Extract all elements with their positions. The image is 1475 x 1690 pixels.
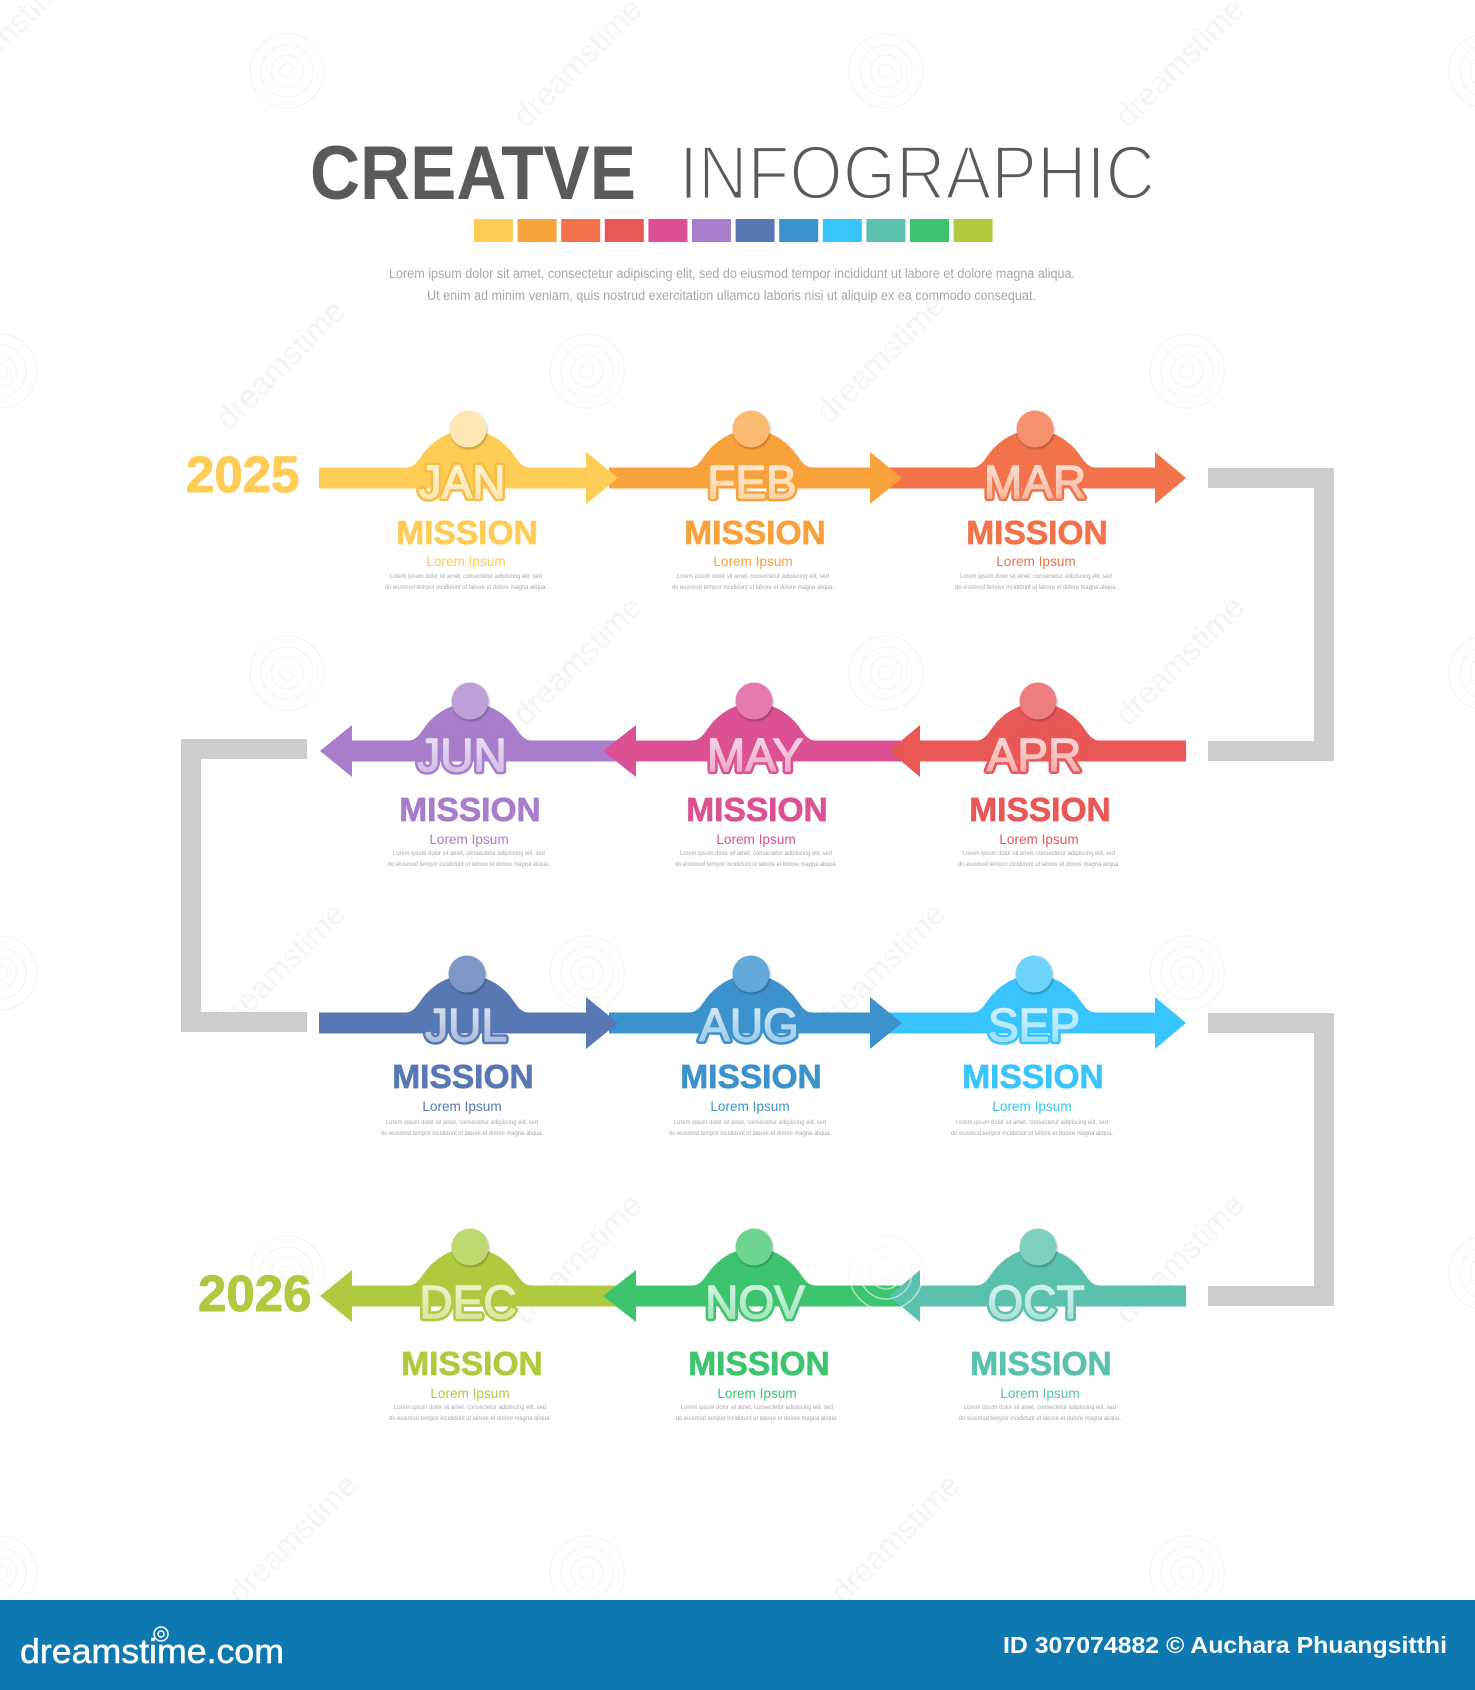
- arrow: December: [320, 1228, 620, 1322]
- description: do eiusmod tempor incididunt ut labore et dolore magna aliqua.: [381, 1130, 543, 1137]
- description: Lorem ipsum dolor sit amet, consectetur adipiscing elit, sed: [681, 1404, 834, 1411]
- background watermark: dreamstime: [808, 286, 952, 430]
- mission heading: MISSION: [969, 792, 1111, 829]
- month label APR: APR: [987, 729, 1081, 781]
- subheading: Lorem Ipsum: [716, 832, 796, 847]
- month label DEC: DEC: [419, 1276, 517, 1328]
- month label MAR: MAR: [984, 456, 1086, 508]
- description: do eiusmod tempor incididunt ut labore et dolore magna aliqua.: [676, 1415, 838, 1422]
- arrow: April: [889, 682, 1186, 777]
- arrow: May: [603, 682, 905, 777]
- description: [951, 1119, 1113, 1137]
- description: do eiusmod tempor incididunt ut labore et dolore magna aliqua.: [672, 584, 834, 591]
- month label SEP: SEP: [988, 999, 1080, 1051]
- year 2026: 2026: [198, 1265, 311, 1322]
- mission heading: MISSION: [392, 1059, 534, 1096]
- background watermark: dreamstime: [808, 895, 952, 1039]
- month label NOV: NOV: [705, 1276, 805, 1328]
- description: Lorem ipsum dolor sit amet, consectetur adipiscing elit, sed: [960, 573, 1113, 580]
- month label OCT: OCT: [987, 1276, 1085, 1328]
- description: [676, 1404, 838, 1422]
- month label APR: APR: [987, 729, 1081, 781]
- description: Lorem ipsum dolor sit amet, consectetur adipiscing elit, sed: [394, 1404, 547, 1411]
- November block: [676, 1276, 838, 1422]
- background watermark: dreamstime: [208, 292, 352, 436]
- description: [958, 850, 1120, 868]
- mission heading: MISSION: [684, 515, 826, 552]
- description: Lorem ipsum dolor sit amet, consectetur adipiscing elit, sed: [963, 850, 1116, 857]
- description: [955, 573, 1117, 591]
- arrow: June: [320, 682, 620, 777]
- arrow: July: [319, 956, 618, 1049]
- title: CREATVE: [310, 131, 636, 216]
- mission heading: MISSION: [399, 792, 541, 829]
- month label MAY: MAY: [707, 729, 803, 781]
- background watermark: dreamstime: [1107, 588, 1251, 732]
- May block: [675, 729, 837, 868]
- month label MAR: MAR: [984, 456, 1086, 508]
- month label JAN: JAN: [419, 456, 505, 508]
- February block: [672, 456, 834, 591]
- background watermark: dreamstime: [823, 1466, 967, 1610]
- description: Lorem ipsum dolor sit amet, consectetur adipiscing elit, sed: [674, 1119, 827, 1126]
- month label AUG: AUG: [699, 999, 799, 1051]
- description: do eiusmod tempor incididunt ut labore et dolore magna aliqua.: [959, 1415, 1121, 1422]
- description: do eiusmod tempor incididunt ut labore et dolore magna aliqua.: [958, 861, 1120, 868]
- month label FEB: FEB: [707, 456, 797, 508]
- subheading: Lorem Ipsum: [426, 554, 506, 569]
- October block: [959, 1276, 1121, 1422]
- month label SEP: SEP: [988, 999, 1080, 1051]
- subtitle text: [389, 266, 1075, 303]
- mission heading: MISSION: [686, 792, 828, 829]
- description: Lorem ipsum dolor sit amet, consectetur adipiscing elit, sed: [964, 1404, 1117, 1411]
- footer bar: [0, 1600, 1475, 1690]
- subheading: Lorem Ipsum: [429, 832, 509, 847]
- description: do eiusmod tempor incididunt ut labore et dolore magna aliqua.: [669, 1130, 831, 1137]
- subtitle text: Lorem ipsum dolor sit amet, consectetur adipiscing elit, sed do eiusmod tempor incididunt ut labore et dolore magna aliqua.: [389, 266, 1075, 281]
- background watermark: dreamstime: [220, 1466, 364, 1610]
- colour swatch strip: [474, 219, 993, 242]
- mission heading: MISSION: [680, 1059, 822, 1096]
- arrow: November: [603, 1228, 905, 1322]
- footer logo: dreamstime.com: [20, 1633, 284, 1671]
- month label JUL: JUL: [425, 999, 507, 1051]
- connector: Sep to Oct bracket: [1208, 1023, 1324, 1296]
- April block: [958, 729, 1120, 868]
- subheading: Lorem Ipsum: [1000, 1386, 1080, 1401]
- subheading: Lorem Ipsum: [430, 1386, 510, 1401]
- description: [388, 850, 550, 868]
- mission heading: MISSION: [966, 515, 1108, 552]
- subheading: Lorem Ipsum: [996, 554, 1076, 569]
- description: [669, 1119, 831, 1137]
- subheading: Lorem Ipsum: [713, 554, 793, 569]
- description: [672, 573, 834, 591]
- subheading: Lorem Ipsum: [999, 832, 1079, 847]
- June block: [388, 729, 550, 868]
- description: Lorem ipsum dolor sit amet, consectetur adipiscing elit, sed: [386, 1119, 539, 1126]
- arrow: March: [889, 410, 1186, 504]
- footer credit: ID 307074882 © Auchara Phuangsitthi: [1003, 1632, 1447, 1658]
- arrow: August: [609, 956, 902, 1049]
- description: do eiusmod tempor incididunt ut labore et dolore magna aliqua.: [955, 584, 1117, 591]
- January block: [385, 456, 547, 591]
- subheading: Lorem Ipsum: [717, 1386, 797, 1401]
- August block: [669, 999, 831, 1137]
- description: [959, 1404, 1121, 1422]
- March block: [955, 456, 1117, 591]
- September block: [951, 999, 1113, 1137]
- description: do eiusmod tempor incididunt ut labore et dolore magna aliqua.: [951, 1130, 1113, 1137]
- month label AUG: AUG: [699, 999, 799, 1051]
- title: [310, 131, 1155, 216]
- July block: [381, 999, 543, 1137]
- connector: Mar to Apr bracket: [1208, 478, 1324, 751]
- description: do eiusmod tempor incididunt ut labore et dolore magna aliqua.: [388, 861, 550, 868]
- mission heading: MISSION: [401, 1346, 543, 1383]
- subtitle text: Ut enim ad minim veniam, quis nostrud exercitation ullamco laboris nisi ut aliquip ex ea commodo consequat.: [427, 288, 1036, 303]
- month label JUL: JUL: [425, 999, 507, 1051]
- month label FEB: FEB: [707, 456, 797, 508]
- description: [389, 1404, 551, 1422]
- month label JUN: JUN: [417, 729, 507, 781]
- description: do eiusmod tempor incididunt ut labore et dolore magna aliqua.: [389, 1415, 551, 1422]
- subheading: Lorem Ipsum: [992, 1099, 1072, 1114]
- background watermark: dreamstime: [505, 588, 649, 732]
- mission heading: MISSION: [396, 515, 538, 552]
- background watermark: dreamstime: [1107, 1186, 1251, 1330]
- month label DEC: DEC: [419, 1276, 517, 1328]
- month label JAN: JAN: [419, 456, 505, 508]
- description: [675, 850, 837, 868]
- December block: [389, 1276, 551, 1422]
- year 2025: 2025: [186, 446, 299, 503]
- watermark over arrows: [849, 1236, 923, 1310]
- month label NOV: NOV: [705, 1276, 805, 1328]
- description: Lorem ipsum dolor sit amet, consectetur adipiscing elit, sed: [680, 850, 833, 857]
- background watermark: dreamstime: [505, 1186, 649, 1330]
- background watermark: dreamstime: [208, 895, 352, 1039]
- month label MAY: MAY: [707, 729, 803, 781]
- mission heading: MISSION: [970, 1346, 1112, 1383]
- arrow: January: [319, 410, 618, 504]
- description: Lorem ipsum dolor sit amet, consectetur adipiscing elit, sed: [393, 850, 546, 857]
- month label JUN: JUN: [417, 729, 507, 781]
- subheading: Lorem Ipsum: [710, 1099, 790, 1114]
- description: [381, 1119, 543, 1137]
- subheading: Lorem Ipsum: [422, 1099, 502, 1114]
- title: INFOGRAPHIC: [679, 131, 1155, 216]
- description: do eiusmod tempor incididunt ut labore et dolore magna aliqua.: [385, 584, 547, 591]
- mission heading: MISSION: [962, 1059, 1104, 1096]
- mission heading: MISSION: [688, 1346, 830, 1383]
- description: [385, 573, 547, 591]
- arrow: September: [889, 956, 1186, 1049]
- description: Lorem ipsum dolor sit amet, consectetur adipiscing elit, sed: [390, 573, 543, 580]
- description: Lorem ipsum dolor sit amet, consectetur adipiscing elit, sed: [677, 573, 830, 580]
- description: do eiusmod tempor incididunt ut labore et dolore magna aliqua.: [675, 861, 837, 868]
- month label OCT: OCT: [987, 1276, 1085, 1328]
- arrow: February: [609, 410, 902, 504]
- arrow: October: [889, 1228, 1186, 1322]
- description: Lorem ipsum dolor sit amet, consectetur adipiscing elit, sed: [956, 1119, 1109, 1126]
- connector: Jun to Jul bracket: [191, 749, 307, 1022]
